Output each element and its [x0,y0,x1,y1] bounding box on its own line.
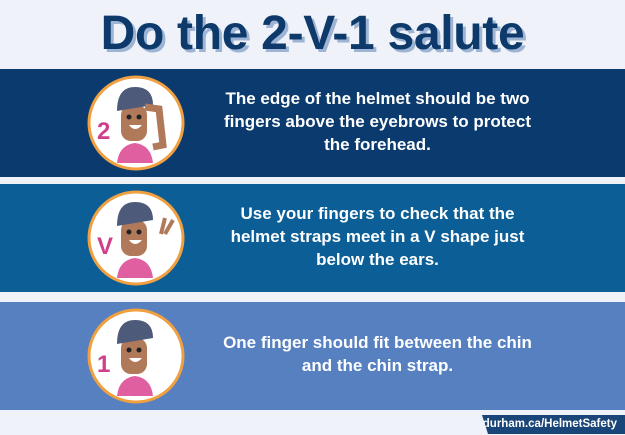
title: Do the 2-V-1 salute [101,7,524,60]
icon: salute V [88,190,184,286]
panel: 2 fingers [0,69,625,177]
icon: salute 1 [88,308,184,404]
text: The edge of the helmet should be two fingers above the eyebrows to protect the forehead. [224,88,531,154]
text: Use your fingers to check that the [241,204,514,222]
icon: salute 2: 2 [97,118,110,145]
panel: 1 finger [0,302,625,410]
icon: salute V: V [97,233,113,260]
text: helmet straps meet in a V shape just [231,226,524,246]
footer link: durham.ca/HelmetSafety [483,418,617,430]
icon: salute 1: 1 [97,351,110,378]
text: One finger should fit between the chin and the chin strap. [223,333,532,375]
icon: salute 2 [88,76,184,170]
footer link [482,415,625,434]
text: below the ears. [316,250,439,268]
text [231,204,524,268]
panel: V [0,184,625,292]
